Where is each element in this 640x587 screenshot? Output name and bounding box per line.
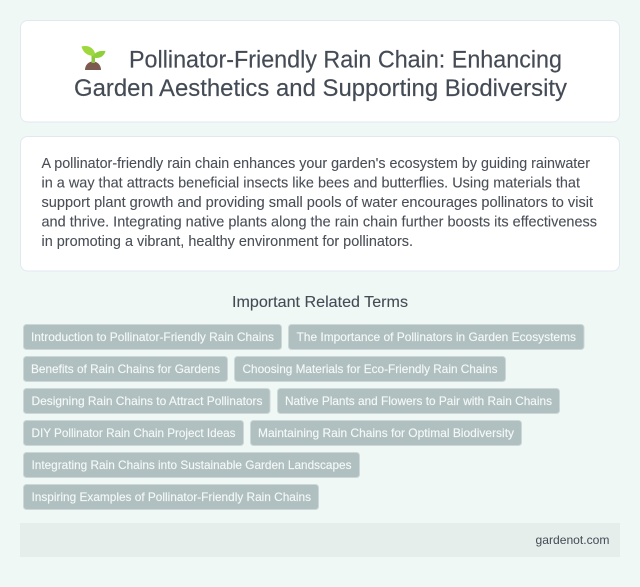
tag: Maintaining Rain Chains for Optimal Biodiversity: [258, 426, 514, 440]
tag: [24, 420, 244, 446]
text block: description: in promoting a vibrant, healthy environment for pollinators.: [42, 233, 413, 250]
text block: description: support plant growth and providing small pools of water encourages pollinators to visit: [42, 194, 594, 211]
tag: Designing Rain Chains to Attract Pollinators: [32, 394, 262, 408]
text block: description: A pollinator-friendly rain chain enhances your garden's ecosystem by guiding rainwater: [42, 155, 590, 172]
tag: Choosing Materials for Eco-Friendly Rain Chains: [242, 362, 498, 376]
tag: DIY Pollinator Rain Chain Project Ideas: [32, 426, 236, 440]
text block: description: in a way that attracts beneficial insects like bees and butterflies. Using materials that: [42, 174, 581, 192]
heading: related terms: Important Related Terms: [232, 294, 408, 311]
tag: [288, 324, 584, 350]
tag: [234, 356, 506, 382]
title: Pollinator-Friendly Rain Chain: Enhancing: [129, 46, 562, 74]
panel: title card: [20, 20, 620, 122]
tag: [24, 484, 318, 510]
tag: Benefits of Rain Chains for Gardens: [31, 362, 220, 376]
text block: description: and thrive. Integrating native plants along the rain chain further boosts its effectiveness: [42, 214, 597, 230]
text block: description: [42, 155, 597, 250]
title: [74, 46, 567, 102]
footer: gardenot.com: [536, 533, 610, 547]
tag: [24, 356, 228, 382]
tag: Native Plants and Flowers to Pair with Rain Chains: [285, 394, 552, 408]
footer: [20, 523, 620, 557]
icon: seedling: [82, 46, 106, 70]
tag: Inspiring Examples of Pollinator-Friendly Rain Chains: [32, 490, 311, 504]
tag group: related terms: [24, 324, 584, 510]
tag: The Importance of Pollinators in Garden Ecosystems: [296, 330, 576, 344]
tag: [24, 388, 270, 414]
tag: [250, 420, 522, 446]
title: Garden Aesthetics and Supporting Biodiversity: [74, 75, 567, 102]
tag: [24, 452, 360, 478]
tag: Integrating Rain Chains into Sustainable Garden Landscapes: [32, 458, 352, 472]
panel: description: [20, 136, 620, 271]
tag: [278, 388, 560, 414]
tag: [24, 324, 282, 350]
tag: Introduction to Pollinator-Friendly Rain Chains: [31, 330, 274, 344]
